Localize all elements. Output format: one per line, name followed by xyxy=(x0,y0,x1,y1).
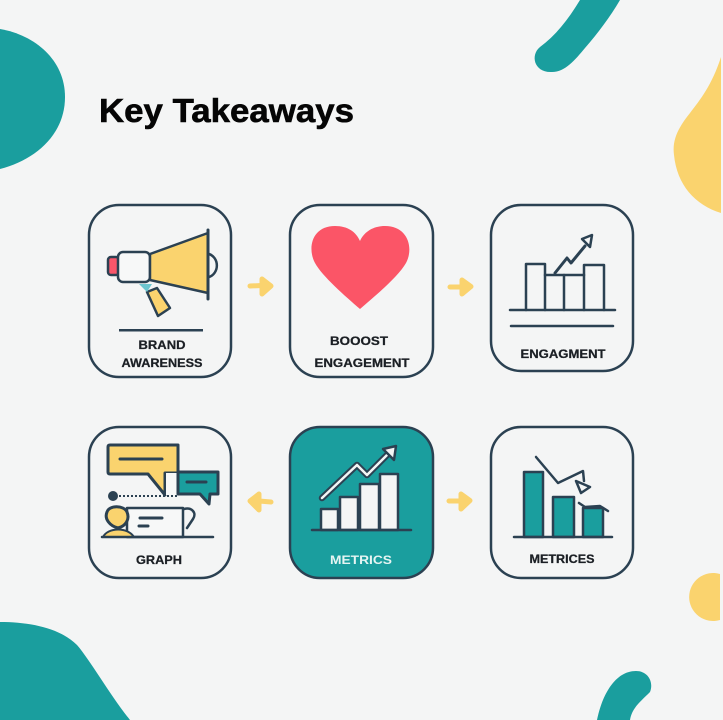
label: metrics: METRICS xyxy=(330,555,392,567)
label: brand awareness: BRAND xyxy=(138,340,186,352)
blob: teal bottom left xyxy=(0,622,130,720)
icon: bar chart with arrow xyxy=(510,235,615,326)
arrow: to engagement xyxy=(450,280,471,294)
panel: metrics highlighted xyxy=(290,427,433,578)
panel: brand awareness xyxy=(89,205,231,377)
icon: chat bubbles and person xyxy=(102,445,218,537)
icon: heart xyxy=(311,226,409,309)
blob: teal top left xyxy=(0,29,65,169)
label: metrices: METRICES xyxy=(530,554,595,566)
label: graph: GRAPH xyxy=(136,555,182,567)
label: engagment: ENGAGMENT xyxy=(520,349,606,361)
title: Key Takeaways xyxy=(99,92,354,129)
icon: falling bar chart xyxy=(514,457,612,537)
label: boost engagement: BOOOST xyxy=(330,336,388,348)
icon: rising bar chart xyxy=(312,446,411,530)
panel: graph xyxy=(89,427,231,578)
label: boost engagement: ENGAGEMENT xyxy=(314,358,410,370)
panel: boost engagement xyxy=(290,205,433,377)
panel: metrices xyxy=(491,427,633,578)
icon: megaphone xyxy=(108,230,217,316)
label: brand awareness xyxy=(122,340,203,370)
blob: teal bottom right xyxy=(597,671,651,720)
blob: yellow circle right xyxy=(689,573,720,621)
blob: teal top right xyxy=(535,0,620,72)
blob: yellow right xyxy=(674,57,721,213)
arrow: to boost engagement xyxy=(250,279,271,294)
panel: engagement xyxy=(491,205,633,371)
arrow: to graph xyxy=(250,494,271,510)
arrow: to metrices xyxy=(449,494,470,509)
label: boost engagement xyxy=(314,336,410,370)
label: brand awareness: AWARENESS xyxy=(122,358,203,370)
